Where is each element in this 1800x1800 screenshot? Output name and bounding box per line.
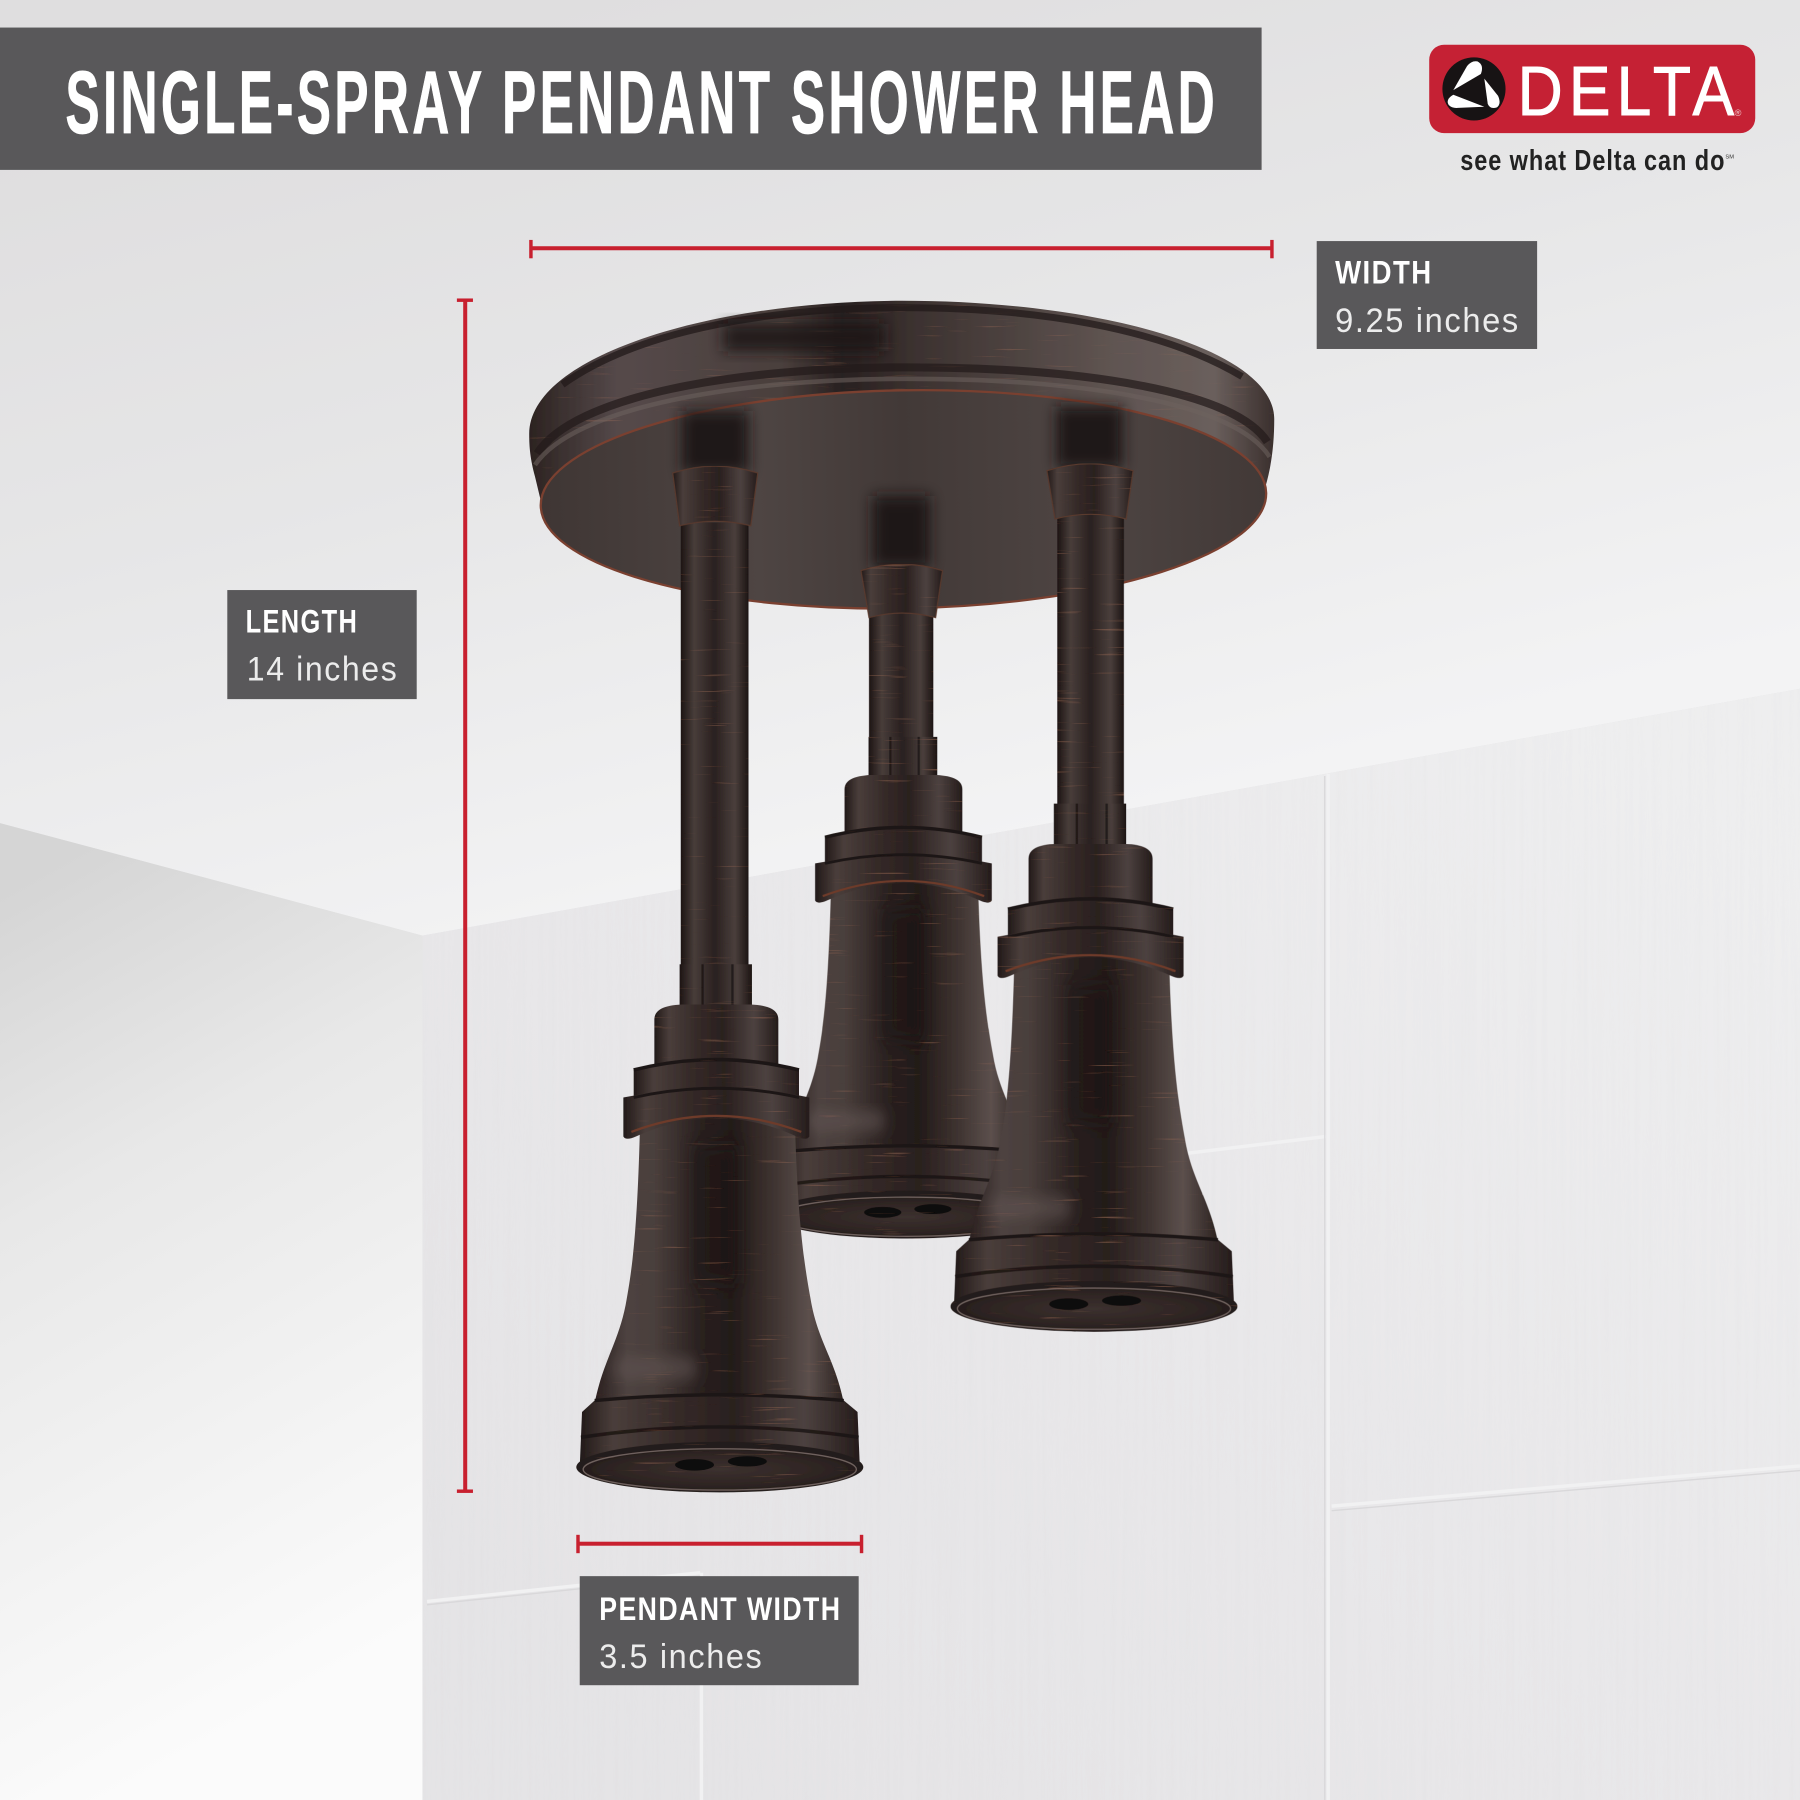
shower fixture (529, 301, 1274, 1492)
background: ceiling (0, 0, 1800, 936)
pendant width dimension line (576, 1535, 863, 1553)
canopy rim (529, 301, 1274, 505)
Delta logo (1429, 45, 1755, 177)
length label: LENGTH (246, 604, 358, 640)
length label: 14 inches (247, 651, 398, 689)
length dimension line (457, 298, 473, 1493)
title banner (0, 28, 1262, 170)
pendant width label: 3.5 inches (599, 1638, 763, 1676)
background: left wall (0, 823, 422, 1800)
canopy underside (539, 384, 1268, 615)
right pendant (951, 464, 1238, 1332)
registered mark: ® (1735, 108, 1742, 118)
width label: 9.25 inches (1335, 302, 1520, 340)
width label (1317, 241, 1537, 349)
length label (227, 590, 417, 699)
ceiling canopy (529, 301, 1274, 615)
left pendant (576, 466, 863, 1492)
service mark: SM (1725, 154, 1734, 160)
logo wordmark: DELTA (1518, 52, 1740, 130)
pendant width label: PENDANT WIDTH (599, 1591, 841, 1627)
pendant width label (580, 1576, 859, 1685)
centre pendant (770, 564, 1043, 1239)
width label: WIDTH (1335, 255, 1433, 291)
width dimension line (529, 240, 1274, 258)
logo tagline: see what Delta can do (1460, 145, 1725, 177)
logo icon: triangular emblem (1442, 57, 1506, 121)
canopy shadows above pipes (682, 406, 1123, 567)
background: right tiled wall (422, 689, 1800, 1800)
